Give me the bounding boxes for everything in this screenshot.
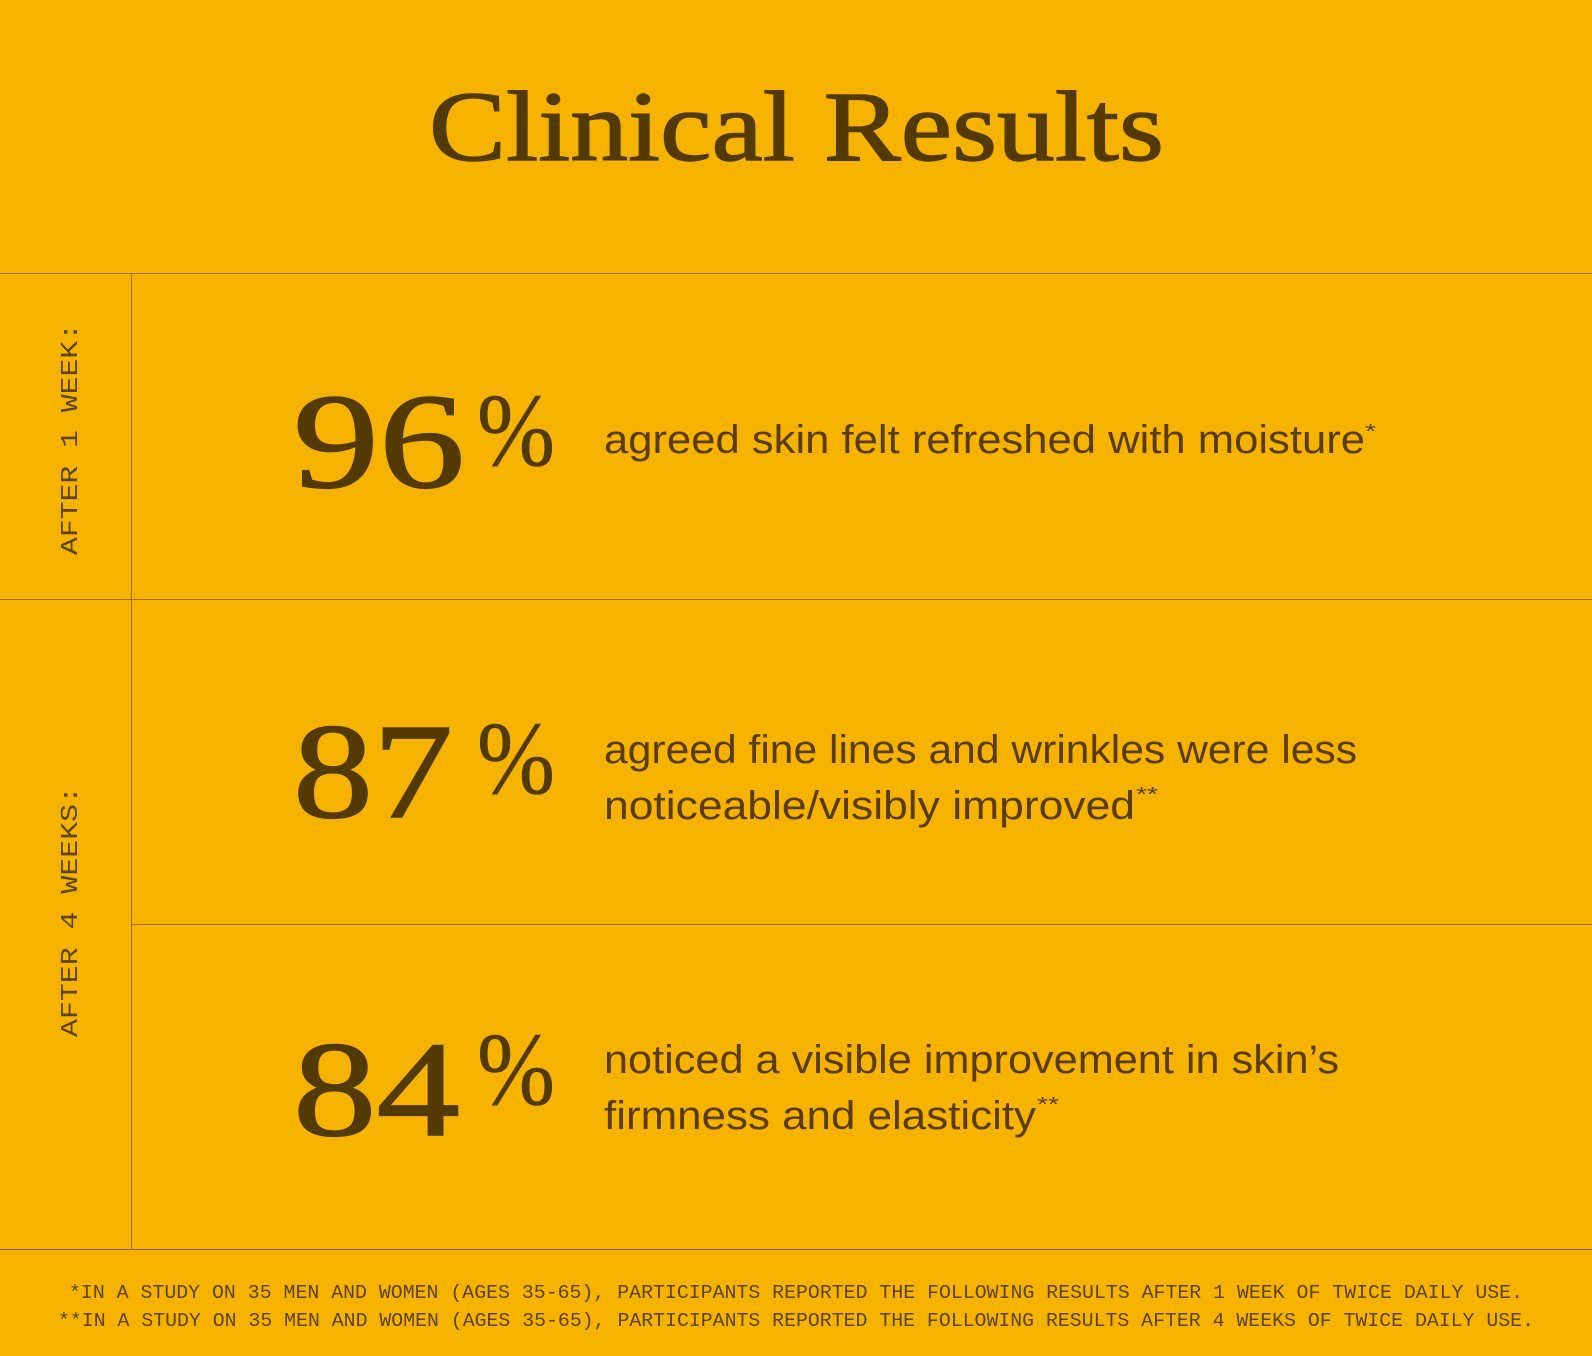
description: fine lines: agreed fine lines and wrinkles were less [604, 728, 1357, 772]
side label: after 1 week: AFTER 1 WEEK: [58, 323, 85, 555]
percent sign: % [477, 701, 555, 816]
description: noticeable: noticeable/visibly improved [604, 784, 1135, 828]
percent sign: % [477, 1012, 555, 1127]
footnote mark: ** [1037, 1094, 1059, 1116]
number: 96: 96 [293, 367, 465, 517]
percent sign: % [477, 373, 555, 488]
footnote one: *IN A STUDY ON 35 MEN AND WOMEN (AGES 35-65), PARTICIPANTS REPORTED THE FOLLOWING RESULTS AFTER 1 WEEK OF TWICE DAILY USE. [69, 1282, 1523, 1304]
side label: after 4 weeks: AFTER 4 WEEKS: [58, 786, 85, 1037]
footnote mark: * [1365, 421, 1376, 443]
title: Clinical Results [429, 71, 1164, 182]
description: moisture: agreed skin felt refreshed with moisture [604, 418, 1365, 462]
footnote mark: ** [1136, 784, 1158, 806]
stat row: 96 percent [293, 367, 1376, 517]
description: firmness line one: noticed a visible improvement in skin’s [604, 1038, 1339, 1082]
stat row: 84 percent [293, 1012, 1339, 1165]
description: firmness line two: firmness and elasticity [604, 1094, 1036, 1138]
number: 87: 87 [293, 697, 453, 847]
footnotes [58, 1282, 1534, 1332]
number: 84: 84 [293, 1015, 460, 1165]
footnote two: **IN A STUDY ON 35 MEN AND WOMEN (AGES 35-65), PARTICIPANTS REPORTED THE FOLLOWING RESULTS AFTER 4 WEEKS OF TWICE DAILY USE. [58, 1310, 1534, 1332]
stat row: 87 percent [293, 697, 1357, 847]
